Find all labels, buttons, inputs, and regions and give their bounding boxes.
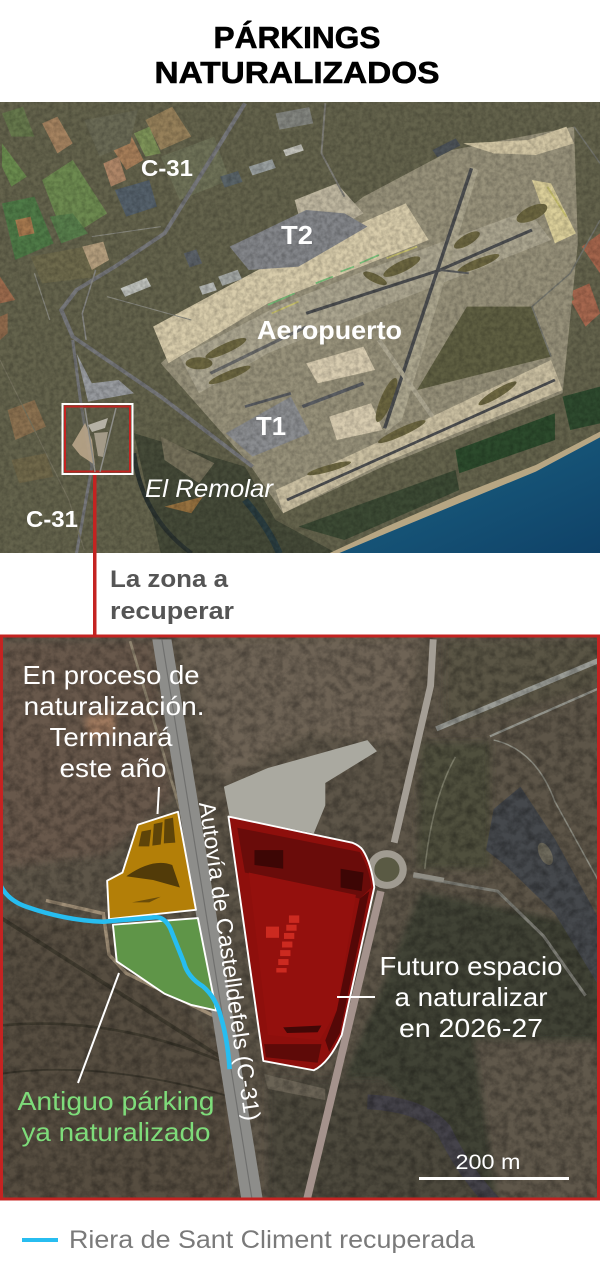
label: Antiguo párking: ya naturalizado: [22, 1117, 210, 1147]
trails: [0, 641, 600, 1096]
airport ground: [161, 127, 578, 513]
service road: [306, 639, 444, 1203]
farmland fields: [0, 107, 600, 483]
label: T2: T2: [281, 220, 313, 250]
leader: green area: [78, 973, 119, 1083]
label: En proceso de naturalización: En proceso de: [22, 660, 200, 690]
panel: airport aerial map: [0, 102, 600, 553]
wetland El Remolar: [134, 433, 337, 553]
title: NATURALIZADOS: [154, 55, 440, 90]
label: Futuro espacio: Futuro espacio: [380, 951, 562, 981]
locator box: [62, 404, 132, 474]
title: [154, 20, 440, 90]
motorway: [152, 639, 263, 1203]
label: C-31 north: C-31: [141, 155, 193, 181]
grey abandoned car park: [224, 740, 377, 833]
terminal T2: [230, 210, 367, 270]
heading: La zona a recuperar: La zona a: [110, 566, 229, 593]
label: Antiguo párking: Antiguo párking: [18, 1086, 214, 1116]
heading: La zona a recuperar: [110, 566, 234, 625]
creek: [367, 1102, 494, 1203]
label: En proceso de naturalización: este año: [60, 753, 166, 783]
coastal pine forest: [299, 387, 600, 540]
label: El Remolar: El Remolar: [145, 475, 275, 503]
naturalized former car park: [113, 918, 216, 1011]
green taxi markings: [268, 187, 566, 313]
olive infields: [186, 200, 551, 478]
label: T1: T1: [256, 411, 286, 441]
scale bar: 200 m: [456, 1151, 520, 1174]
label: Autovía de Castelldefels: Autovía de Castelldefels (C-31): [194, 800, 266, 1122]
label: Futuro espacio: a naturalizar: [394, 982, 548, 1012]
eastern infield: [417, 307, 551, 390]
detail map frame: [2, 636, 598, 1199]
heading: La zona a recuperar: recuperar: [110, 598, 234, 625]
leader: red area: [337, 996, 375, 998]
future naturalization area: [228, 817, 374, 1070]
legend: Riera de Sant Climent recuperada: [69, 1226, 475, 1254]
runways: [210, 168, 555, 500]
label: Futuro espacio: en 2026-27: [399, 1013, 543, 1043]
sea: [329, 432, 600, 553]
scale bar: [419, 1151, 569, 1180]
title: PÁRKINGS: [214, 20, 380, 55]
label: En proceso de naturalización: naturalización.: [24, 691, 204, 721]
roundabout: [367, 850, 407, 889]
lake: [486, 787, 600, 988]
label: Antiguo párking: [18, 1086, 214, 1147]
terminal T1: [226, 383, 364, 457]
leader: orange area: [158, 787, 159, 814]
label: Aeropuerto: Aeropuerto: [257, 315, 402, 345]
Riera de Sant Climent line: [0, 884, 230, 1069]
label: C-31 south: C-31: [26, 506, 78, 532]
highway C-31: [0, 103, 600, 553]
panel: detail map: [0, 636, 600, 1203]
leader line to detail map: [93, 475, 96, 637]
area in naturalization process: [107, 812, 196, 919]
aprons and taxiways: [153, 127, 576, 513]
label: En proceso de naturalización: [24, 665, 202, 778]
label: En proceso de naturalización: Terminará: [50, 722, 173, 752]
cargo buildings: [77, 107, 460, 402]
ground patches: [0, 637, 600, 1201]
label: Futuro espacio: [382, 956, 562, 1038]
